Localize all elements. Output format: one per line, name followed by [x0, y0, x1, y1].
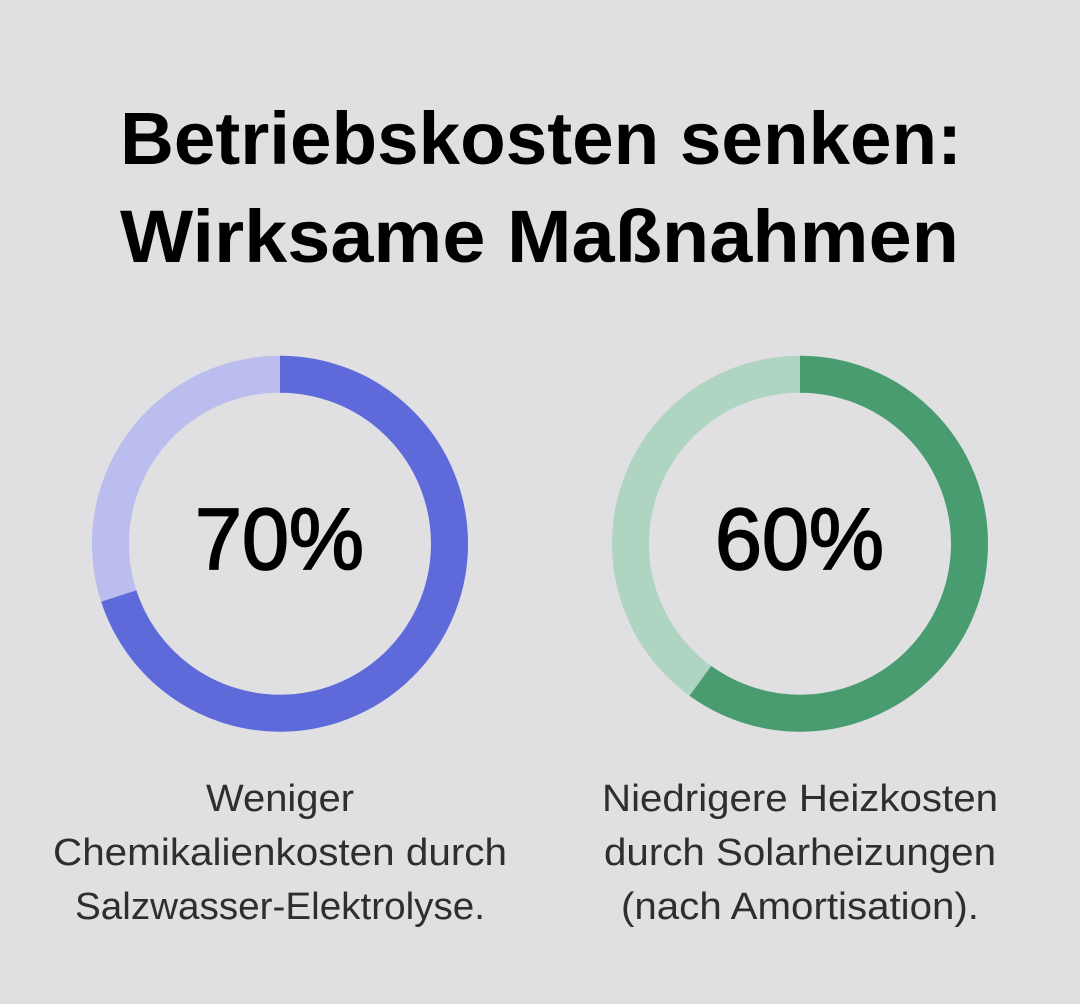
title — [120, 97, 962, 278]
title: Betriebskosten senken: — [120, 97, 962, 180]
panel: 70% chemical costs — [53, 374, 507, 928]
description: chemical costs: Salzwasser-Elektrolyse. — [75, 886, 485, 928]
description: heating costs: (nach Amortisation). — [621, 886, 979, 928]
description: heating costs — [602, 778, 998, 928]
description: heating costs: Niedrigere Heizkosten — [602, 778, 998, 820]
donut chart: 60% — [630, 374, 970, 713]
description: chemical costs: Weniger — [206, 778, 354, 820]
title: Wirksame Maßnahmen — [120, 195, 959, 278]
value: 60%: 60% — [715, 491, 884, 588]
panel: 60% heating costs — [602, 374, 998, 928]
description: heating costs: durch Solarheizungen — [604, 832, 996, 874]
description: chemical costs: Chemikalienkosten durch — [53, 832, 507, 874]
donut chart: 70% — [110, 374, 450, 713]
value: 70%: 70% — [195, 491, 364, 588]
description: chemical costs — [53, 778, 507, 928]
